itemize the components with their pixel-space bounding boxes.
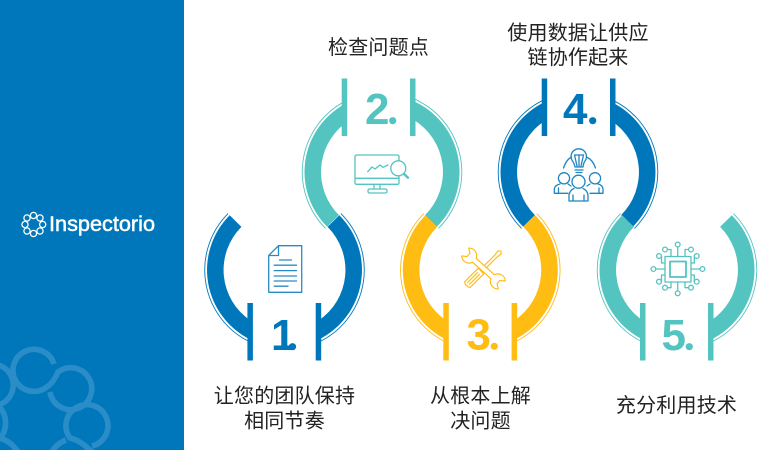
label: step 3 — [430, 384, 531, 432]
step 1: blue ring — [205, 214, 364, 360]
watermark: ring pattern — [0, 349, 108, 450]
icon: team with light bulb — [554, 149, 603, 201]
icon: wrench and screwdriver — [460, 246, 507, 291]
ring band — [205, 214, 364, 342]
ring band — [498, 100, 658, 228]
step 2: teal ring — [302, 78, 462, 228]
step 3: yellow ring — [401, 214, 560, 360]
logo mark: ring of circles — [22, 212, 46, 237]
number 1: 1. — [271, 311, 308, 360]
label: step 1: 让您的团队保持 — [214, 384, 355, 408]
number 5: 5. — [662, 311, 698, 360]
label: step 5: 充分利用技术 — [616, 394, 737, 417]
number 4: 4. — [563, 85, 600, 134]
number 2: 2. — [365, 85, 402, 134]
label: step 2: 检查问题点 — [328, 36, 429, 59]
step 5: teal ring — [597, 214, 757, 360]
label: step 1 — [214, 384, 355, 432]
ring band — [597, 214, 757, 342]
label: step 4: 链协作起来 — [528, 46, 628, 69]
label: step 4 — [507, 22, 649, 69]
icon: microchip — [651, 242, 705, 296]
panel: left brand sidebar — [0, 0, 184, 450]
label: step 3: 从根本上解 — [430, 384, 531, 408]
label: step 3: 决问题 — [450, 410, 511, 432]
logo: Inspectorio — [22, 212, 155, 237]
ring band — [401, 214, 560, 342]
label: step 4: 使用数据让供应 — [507, 22, 649, 44]
icon: monitor with magnifier — [355, 155, 408, 193]
step 4: blue ring — [498, 78, 658, 228]
logo wordmark: Inspectorio — [49, 213, 155, 236]
number 3: 3. — [466, 311, 503, 360]
icon: document — [269, 246, 302, 292]
label: step 1: 相同节奏 — [244, 410, 325, 432]
ring band — [302, 98, 462, 228]
